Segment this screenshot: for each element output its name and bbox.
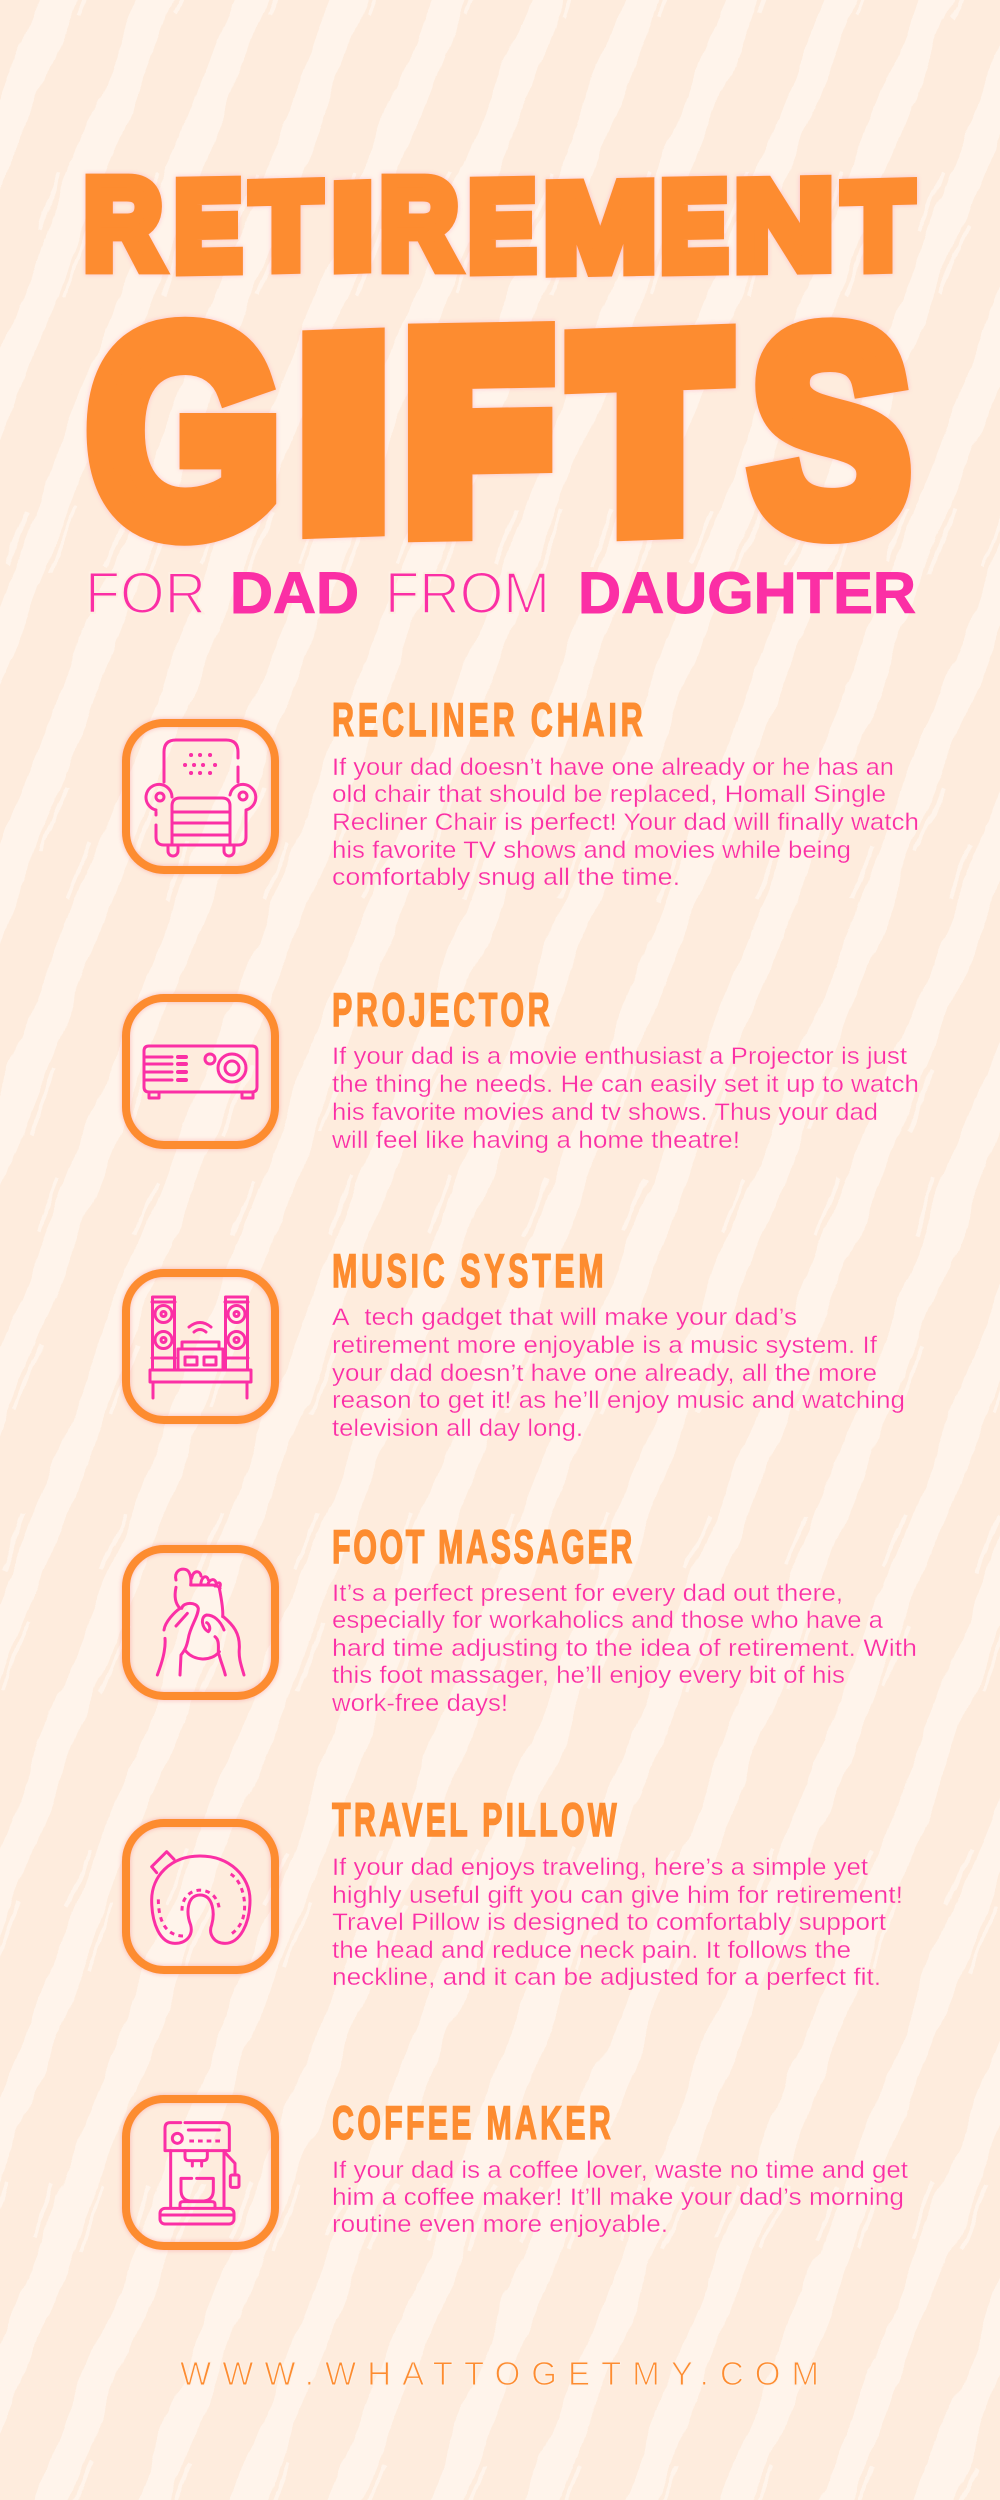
title: RETIREMENT: E xyxy=(661,156,727,296)
subtitle: DAD xyxy=(230,561,359,626)
body: projector: If your dad is a movie enthusiast a Projector is just xyxy=(332,1043,907,1070)
subtitle xyxy=(85,561,916,626)
body: travel pillow: the head and reduce neck pain. It follows the xyxy=(332,1937,851,1964)
title: RETIREMENT: E xyxy=(469,156,535,296)
body: music system: reason to get it! as he’ll enjoy music and watching xyxy=(332,1387,905,1414)
title: RETIREMENT: R xyxy=(84,153,162,294)
title: RETIREMENT: N xyxy=(734,154,834,297)
title: RETIREMENT: E xyxy=(175,156,241,296)
body: music system: television all day long. xyxy=(332,1415,583,1442)
icon box: coffee maker xyxy=(126,2099,275,2246)
body: coffee maker: If your dad is a coffee lover, waste no time and get xyxy=(332,2157,908,2184)
heading: travel pillow: TRAVEL PILLOW xyxy=(332,1794,617,1847)
title: RETIREMENT: T xyxy=(844,159,912,294)
item: recliner chair xyxy=(126,694,919,891)
body: foot massager: hard time adjusting to the idea of retirement. With xyxy=(332,1635,917,1662)
body: recliner chair xyxy=(332,754,919,891)
body: foot massager: work-free days! xyxy=(331,1690,508,1717)
body: music system xyxy=(332,1304,905,1442)
body: recliner chair: If your dad doesn’t have one already or he has an xyxy=(332,754,894,781)
body: music system: your dad doesn’t have one already, all the more xyxy=(332,1360,877,1387)
subtitle: DAUGHTER xyxy=(578,561,916,626)
icon: music system xyxy=(150,1297,251,1398)
body: recliner chair: comfortably snug all the time. xyxy=(332,864,680,891)
heading: coffee maker: COFFEE MAKER xyxy=(332,2097,611,2150)
body: recliner chair: Recliner Chair is perfect! Your dad will finally watch xyxy=(332,809,919,836)
icon box: foot massager xyxy=(126,1549,275,1696)
item: projector xyxy=(126,984,919,1154)
body: travel pillow: Travel Pillow is designed to comfortably support xyxy=(332,1909,886,1936)
subtitle: FROM xyxy=(385,561,550,626)
icon box: music system xyxy=(126,1273,275,1420)
icon box: recliner chair xyxy=(126,723,275,870)
item: music system xyxy=(126,1245,905,1442)
body: coffee maker: routine even more enjoyable. xyxy=(332,2211,668,2238)
heading: music system: MUSIC SYSTEM xyxy=(332,1245,604,1298)
icon: foot and hands xyxy=(157,1569,244,1675)
item: travel pillow xyxy=(126,1794,903,1991)
icon: coffee machine xyxy=(160,2123,239,2224)
body: foot massager: especially for workaholics and those who have a xyxy=(332,1607,884,1634)
icon box: travel pillow xyxy=(126,1823,275,1970)
title: RETIREMENT: T xyxy=(252,159,320,294)
title: GIFTS: G xyxy=(88,270,280,591)
item: coffee maker xyxy=(126,2097,908,2246)
body: projector: will feel like having a home theatre! xyxy=(331,1127,740,1154)
title: RETIREMENT: R xyxy=(380,153,458,294)
body: foot massager: this foot massager, he’ll enjoy every bit of his xyxy=(332,1662,845,1689)
title: RETIREMENT: I xyxy=(333,160,372,293)
title: GIFTS xyxy=(88,270,910,591)
icon box: projector xyxy=(126,998,275,1145)
heading: recliner chair: RECLINER CHAIR xyxy=(332,694,643,747)
title: GIFTS: I xyxy=(303,290,384,575)
item: foot massager xyxy=(126,1521,917,1717)
body: coffee maker: him a coffee maker! It’ll make your dad’s morning xyxy=(332,2184,904,2211)
subtitle: FOR xyxy=(85,561,206,626)
body: foot massager: It’s a perfect present for every dad out there, xyxy=(332,1580,843,1607)
body: projector xyxy=(331,1043,919,1154)
body: travel pillow: If your dad enjoys traveling, here’s a simple yet xyxy=(332,1854,868,1881)
body: travel pillow: highly useful gift you can give him for retirement! xyxy=(332,1882,903,1909)
title: GIFTS: S xyxy=(751,272,910,589)
body: travel pillow xyxy=(332,1854,903,1991)
icon: armchair xyxy=(146,740,256,856)
body: coffee maker xyxy=(332,2157,908,2238)
body: travel pillow: neckline, and it can be adjusted for a perfect fit. xyxy=(332,1964,881,1991)
heading: projector: PROJECTOR xyxy=(332,984,550,1037)
title: GIFTS: F xyxy=(409,283,547,581)
body: projector: his favorite movies and tv shows. Thus your dad xyxy=(332,1099,878,1126)
body: music system: A tech gadget that will make your dad’s xyxy=(332,1304,797,1331)
footer url: WWW.WHATTOGETMY.COM xyxy=(180,2355,819,2392)
body: recliner chair: his favorite TV shows and movies while being xyxy=(332,837,851,864)
icon: neck pillow xyxy=(152,1852,250,1943)
title: RETIREMENT xyxy=(84,153,912,298)
title: GIFTS: T xyxy=(578,287,722,580)
title: RETIREMENT: M xyxy=(543,157,657,298)
body: projector: the thing he needs. He can easily set it up to watch xyxy=(332,1071,919,1098)
icon: projector xyxy=(144,1046,257,1098)
body: recliner chair: old chair that should be replaced, Homall Single xyxy=(332,781,886,808)
heading: foot massager: FOOT MASSAGER xyxy=(332,1521,632,1574)
body: music system: retirement more enjoyable is a music system. If xyxy=(332,1332,877,1359)
body: foot massager xyxy=(331,1580,917,1717)
